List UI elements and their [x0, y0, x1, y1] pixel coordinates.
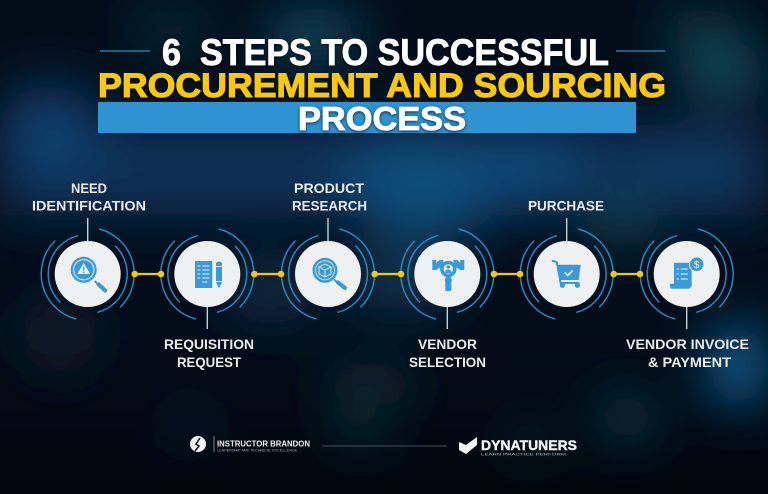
step 1: need identification — [32, 180, 146, 319]
icon: invoice with coin: $ — [694, 260, 700, 271]
logo mark — [459, 437, 477, 454]
label: IDENTIFICATION — [32, 198, 146, 214]
title line 1: 6 STEPS TO SUCCESSFUL — [162, 32, 609, 73]
label: PURCHASE — [528, 198, 604, 214]
icon: invoice with coin — [670, 256, 704, 289]
label: VENDOR — [418, 336, 477, 352]
icon: vendor handshake — [432, 260, 464, 291]
rings and disc — [401, 229, 494, 319]
rings and disc — [161, 229, 254, 319]
icon: shopping cart — [553, 261, 581, 288]
step 5: purchase — [520, 198, 613, 319]
label: SELECTION — [409, 354, 486, 370]
label: RESEARCH — [292, 198, 367, 214]
rings and disc — [520, 229, 613, 319]
logo mark — [190, 436, 214, 452]
rings and disc — [640, 229, 733, 319]
label: VENDOR INVOICE — [626, 336, 749, 352]
logo name: DYNATUNERS — [481, 437, 577, 453]
label: NEED — [71, 180, 107, 196]
icon: checklist and pencil — [195, 261, 222, 288]
step 6: vendor invoice and payment — [626, 229, 749, 370]
label — [409, 336, 486, 370]
footer logo: dynatuners — [459, 437, 577, 456]
label: REQUISITION — [164, 336, 254, 352]
label — [32, 180, 146, 214]
title banner — [98, 102, 636, 133]
label: PRODUCT — [294, 180, 364, 196]
label — [626, 336, 749, 370]
logo tagline: LEADERSHIP AND TECHNICAL EXCELLENCE — [217, 448, 297, 452]
step 3: product research — [281, 180, 375, 319]
label: REQUEST — [177, 354, 241, 370]
icon: magnifier with cube — [312, 258, 345, 288]
title rule left — [100, 50, 150, 52]
connectors — [131, 271, 643, 277]
logo tagline: LEARN PRACTICE PERFORM — [481, 452, 566, 456]
rings and disc — [41, 229, 134, 319]
label — [164, 336, 254, 370]
icon: magnifier with warning — [71, 257, 105, 290]
title rule right — [616, 50, 665, 52]
footer logo: instructor brandon — [190, 436, 310, 452]
title line 3: PROCESS — [298, 100, 466, 137]
title — [98, 32, 666, 137]
step 2: requisition request — [161, 229, 254, 370]
logo name: INSTRUCTOR BRANDON — [217, 438, 310, 448]
title line 2: PROCUREMENT AND SOURCING — [98, 67, 666, 105]
label — [292, 180, 367, 214]
step 4: vendor selection — [401, 229, 494, 370]
rings and disc — [281, 229, 375, 319]
label: & PAYMENT — [648, 354, 731, 370]
